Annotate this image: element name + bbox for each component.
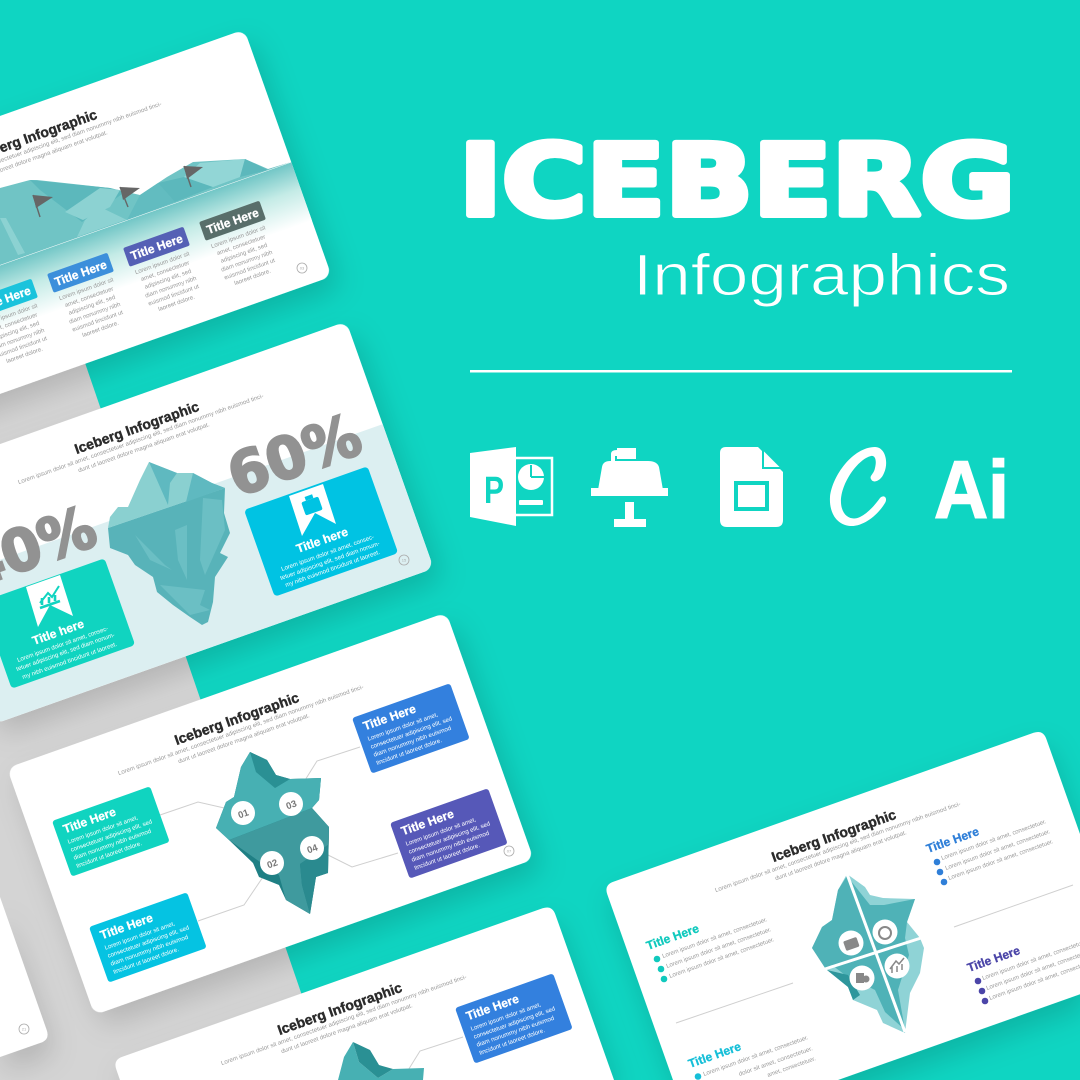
column: grey title: Lorem ipsum dolor sit (210, 225, 267, 250)
column: blue title: diam nonummy nibh (69, 302, 121, 326)
panel: cyan card: Title here (294, 524, 350, 556)
callout blue slide 4: Lorem ipsum dolor sit amet, (470, 1002, 542, 1033)
icon: briefcase (301, 494, 323, 516)
divider (470, 370, 1012, 372)
slide 2 heading: Lorem ipsum dolor sit amet, consectetuer adipiscing elit, sed diam nonummy nibh euismod tinci- (17, 394, 265, 486)
panel: teal card: tetuer adipiscing elit, sed diam nonum- (16, 633, 116, 673)
marker 02: 02 (266, 857, 279, 871)
ribbon (289, 484, 336, 536)
slide 3 frame (7, 612, 534, 1015)
icon circle: briefcase (838, 930, 864, 956)
column: grey title: laoreet dolore. (234, 268, 272, 287)
slide 3 heading: Iceberg Infographic (172, 689, 301, 748)
column: grey title: adipiscing elit, sed (220, 243, 268, 265)
icon: PowerPoint (470, 447, 552, 526)
callout purple (390, 788, 508, 879)
slide 5 heading: Iceberg Infographic (769, 806, 898, 865)
marker 04: 04 (306, 842, 320, 856)
callout teal: consectetuer adipiscing elit, sed (70, 819, 153, 854)
slide: bottom-left partial: 21 (22, 1026, 27, 1032)
panel: cyan card: Lorem ipsum dolor sit amet, consec- (281, 535, 375, 573)
callout blue slide 4: tincidunt ut laoreet dolore. (479, 1028, 546, 1057)
callout teal: diam nonummy nibh euismod (73, 829, 152, 862)
slide 1 water band (0, 162, 312, 376)
list: teal: Lorem ipsum dolor sit amet, consectetuer. (666, 927, 773, 970)
callout cyan: tincidunt ut laoreet dolore. (113, 947, 180, 976)
panel: teal card (0, 558, 135, 689)
callout purple: consectetuer adipiscing elit, sed (408, 821, 491, 856)
slide 4 heading: dunt ut laoreet dolore magna aliquam erat volutpat. (280, 1003, 414, 1055)
icon: Keynote (591, 448, 668, 527)
icon: PowerPoint: P (484, 470, 504, 512)
callout teal (52, 786, 170, 877)
panel: cyan card: my nibh euismod tincidunt ut laoreet. (285, 550, 381, 589)
slide 2 frame (0, 321, 434, 724)
column: grey title (199, 201, 284, 291)
marker 03 (279, 792, 303, 816)
callout purple: Lorem ipsum dolor sit amet, (405, 817, 477, 848)
callout blue slide 4: Title Here (464, 992, 521, 1023)
column: blue title (47, 253, 132, 343)
callout blue slide 4: consectetuer adipiscing elit, sed (473, 1006, 556, 1041)
slide 5: quadrant iceberg with bullet lists (606, 732, 1080, 1080)
list: cyan: amet, consectetuer. (767, 1056, 817, 1079)
slide 2 water area (0, 424, 434, 724)
list: purple: Title Here (965, 943, 1022, 975)
list: blue (924, 819, 1055, 885)
icon circle: chart (884, 954, 910, 978)
column: blue title: Title Here (53, 257, 109, 289)
icon circle: stopwatch (872, 920, 898, 944)
marker 02 (260, 851, 284, 875)
column: blue title: euismod tincidunt ut (72, 310, 124, 333)
slide 1 page number (297, 263, 307, 273)
column: purple title: adipiscing elit, sed (144, 269, 192, 291)
icon: rising chart (40, 586, 60, 608)
grey backdrop behind slides (0, 290, 331, 1080)
callout blue: diam nonummy nibh euismod (373, 726, 452, 759)
callout blue: Title Here (361, 702, 418, 733)
marker 01 (231, 801, 255, 825)
callout cyan (89, 892, 207, 983)
callout purple: tincidunt ut laoreet dolore. (414, 843, 481, 872)
column: grey title: euismod tincidunt ut (224, 258, 276, 281)
callout blue (352, 683, 470, 774)
slide 5 frame (606, 732, 1080, 1080)
connector lines (160, 747, 398, 921)
slide 4 heading: Lorem ipsum dolor sit amet, consectetuer adipiscing elit, sed diam nonummy nibh euismod tinci- (220, 975, 468, 1067)
slide 3: four numbered callouts (7, 612, 534, 1015)
marker 03: 03 (285, 798, 298, 812)
panel: teal card: my nibh euismod tincidunt ut laoreet. (22, 642, 118, 681)
flag 1 (33, 195, 53, 217)
column: blue title: amet, consectetuer (64, 286, 114, 309)
list: teal: Lorem ipsum dolor sit amet, consectetuer. (662, 917, 769, 960)
icon: Canva C (830, 447, 886, 526)
callout teal: tincidunt ut laoreet dolore. (76, 841, 143, 870)
slide: bottom-left partial (0, 897, 48, 1057)
panel: cyan card (244, 466, 398, 597)
slide 2 heading: Iceberg Infographic (72, 398, 201, 457)
big number 60 percent: 60% (219, 401, 370, 510)
column: blue title: Lorem ipsum dolor sit (58, 277, 115, 302)
list: cyan: dolor sit amet, consectetuer. (738, 1046, 814, 1078)
slide 1 iceberg tips (0, 159, 291, 265)
slide 2 page number (399, 555, 409, 565)
slide 4 connector and iceberg (338, 1037, 463, 1080)
column: cyan title (0, 279, 56, 369)
list: blue: Lorem ipsum dolor sit amet, consectetuer. (945, 829, 1052, 872)
slide 5 heading: dunt ut laoreet dolore magna aliquam erat volutpat. (774, 830, 908, 882)
list: blue: Lorem ipsum dolor sit amet, consectetuer. (948, 839, 1055, 882)
iceberg 3D (216, 752, 329, 914)
icon: Google Slides (720, 447, 783, 527)
list: cyan: Title Here (686, 1039, 743, 1071)
slide 4 frame (115, 907, 614, 1080)
callout cyan: Title Here (98, 911, 155, 942)
callout blue: consectetuer adipiscing elit, sed (370, 716, 453, 751)
list: purple (965, 939, 1080, 1004)
callout purple: Title Here (399, 807, 456, 838)
slide 3 page number: 07 (507, 848, 512, 854)
slide 5 heading: Lorem ipsum dolor sit amet, consectetuer adipiscing elit, sed diam nonummy nibh euismod tinci- (714, 802, 962, 894)
column: blue title: adipiscing elit, sed (68, 295, 116, 317)
slide 1 page number: 03 (300, 266, 305, 270)
iceberg illustration (108, 462, 230, 625)
flag 3 (184, 166, 203, 187)
column: blue title: laoreet dolore. (82, 320, 120, 339)
slide 2 page number: 15 (402, 558, 407, 562)
callout blue: Lorem ipsum dolor sit amet, (367, 712, 439, 743)
callout teal: Title Here (61, 805, 118, 836)
callout blue: tincidunt ut laoreet dolore. (376, 738, 443, 767)
icon circle: coins (850, 966, 874, 990)
callout purple: diam nonummy nibh euismod (411, 831, 490, 864)
column: purple title: amet, consectetuer (140, 260, 190, 283)
column: purple title: diam nonummy nibh (145, 276, 197, 300)
column: grey title: diam nonummy nibh (221, 250, 273, 274)
list: blue: Lorem ipsum dolor sit amet, consectetuer. (941, 819, 1048, 862)
callout cyan: diam nonummy nibh euismod (110, 935, 189, 968)
dividers (676, 885, 1073, 1023)
slide 3 heading: Lorem ipsum dolor sit amet, consectetuer adipiscing elit, sed diam nonummy nibh euismod tinci- (117, 685, 365, 777)
column: purple title: laoreet dolore. (158, 294, 196, 313)
callout blue slide 4 (455, 973, 573, 1064)
title: ICEBERG: ICEBERG (459, 124, 1015, 239)
slide 3 page number (504, 846, 514, 856)
slide 4 heading: Iceberg Infographic (275, 979, 404, 1038)
list: blue: Title Here (924, 824, 981, 856)
column: cyan title: laoreet dolore. (6, 346, 44, 365)
subtitle: Infographics: Infographics (633, 243, 1010, 308)
slide 2 heading: dunt ut laoreet dolore magna aliquam erat volutpat. (77, 422, 211, 474)
marker 01: 01 (237, 807, 251, 821)
column: purple title (123, 227, 208, 317)
slide 1 frame (0, 29, 332, 432)
callout cyan: consectetuer adipiscing elit, sed (107, 925, 190, 960)
iceberg quadrants (812, 874, 924, 1033)
panel: cyan card: tetuer adipiscing elit, sed diam nonum- (280, 541, 381, 582)
callout cyan: Lorem ipsum dolor sit amet, (104, 921, 176, 952)
callout teal: Lorem ipsum dolor sit amet, (67, 815, 139, 846)
slide 2: 40/60 percent iceberg (0, 321, 434, 724)
panel: teal card: Title here (30, 616, 86, 648)
panel: teal card: Lorem ipsum dolor sit amet, consec- (17, 626, 109, 664)
column: purple title: Lorem ipsum dolor sit (134, 251, 191, 276)
slide 1: mountains with flags (0, 29, 332, 432)
callout blue slide 4: diam nonummy nibh euismod (476, 1016, 555, 1049)
slide 4: partial bottom (115, 907, 614, 1080)
column: grey title: amet, consectetuer (216, 234, 266, 257)
column: grey title: Title Here (205, 205, 261, 237)
list: teal (644, 917, 776, 982)
list: teal: Title Here (644, 921, 701, 953)
slide 3 heading: dunt ut laoreet dolore magna aliquam erat volutpat. (177, 713, 311, 765)
list: teal: Lorem ipsum dolor sit amet, consectetuer. (669, 937, 776, 980)
ribbon (26, 575, 73, 627)
list: cyan: Lorem ipsum dolor sit amet, consectetuer. (703, 1035, 810, 1078)
marker 04 (300, 836, 324, 860)
column: purple title: Title Here (129, 231, 185, 263)
flag 2 (120, 187, 140, 207)
column: purple title: euismod tincidunt ut (148, 284, 200, 307)
icon: Illustrator Ai: Ai (934, 445, 1009, 536)
